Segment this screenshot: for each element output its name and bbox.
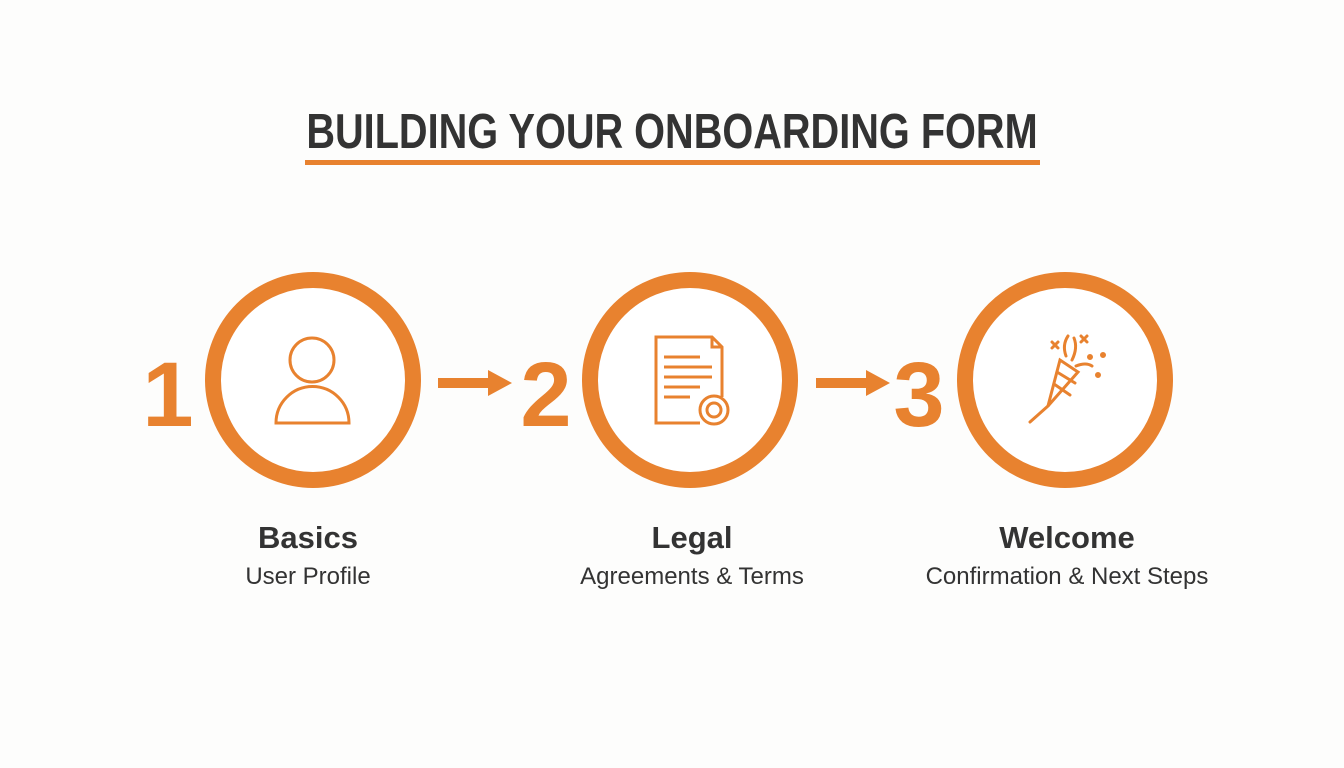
label: Basics: Basics (258, 520, 358, 555)
label: Legal: Legal (652, 520, 732, 555)
arrow 1 (438, 370, 512, 396)
icon: user (276, 338, 349, 423)
step 3 number: 3 (893, 344, 945, 446)
title: BUILDING YOUR ONBOARDING FORM (306, 105, 1038, 159)
step 2 circle (590, 280, 790, 480)
step 1 number: 1 (142, 344, 194, 446)
step 1 circle (213, 280, 413, 480)
label: Legal (580, 520, 804, 590)
title underline (305, 160, 1040, 165)
label: Welcome (926, 520, 1208, 590)
label: Basics: User Profile (245, 563, 371, 590)
label: Legal: Agreements & Terms (580, 563, 804, 590)
step 3 circle (965, 280, 1165, 480)
icon: document with seal (656, 337, 728, 424)
label: Basics (245, 520, 371, 590)
label: Welcome: Welcome (999, 520, 1135, 555)
arrow 2 (816, 370, 890, 396)
icon: party popper (1030, 336, 1104, 422)
label: Welcome: Confirmation & Next Steps (926, 563, 1208, 590)
step 2 number: 2 (520, 344, 572, 446)
